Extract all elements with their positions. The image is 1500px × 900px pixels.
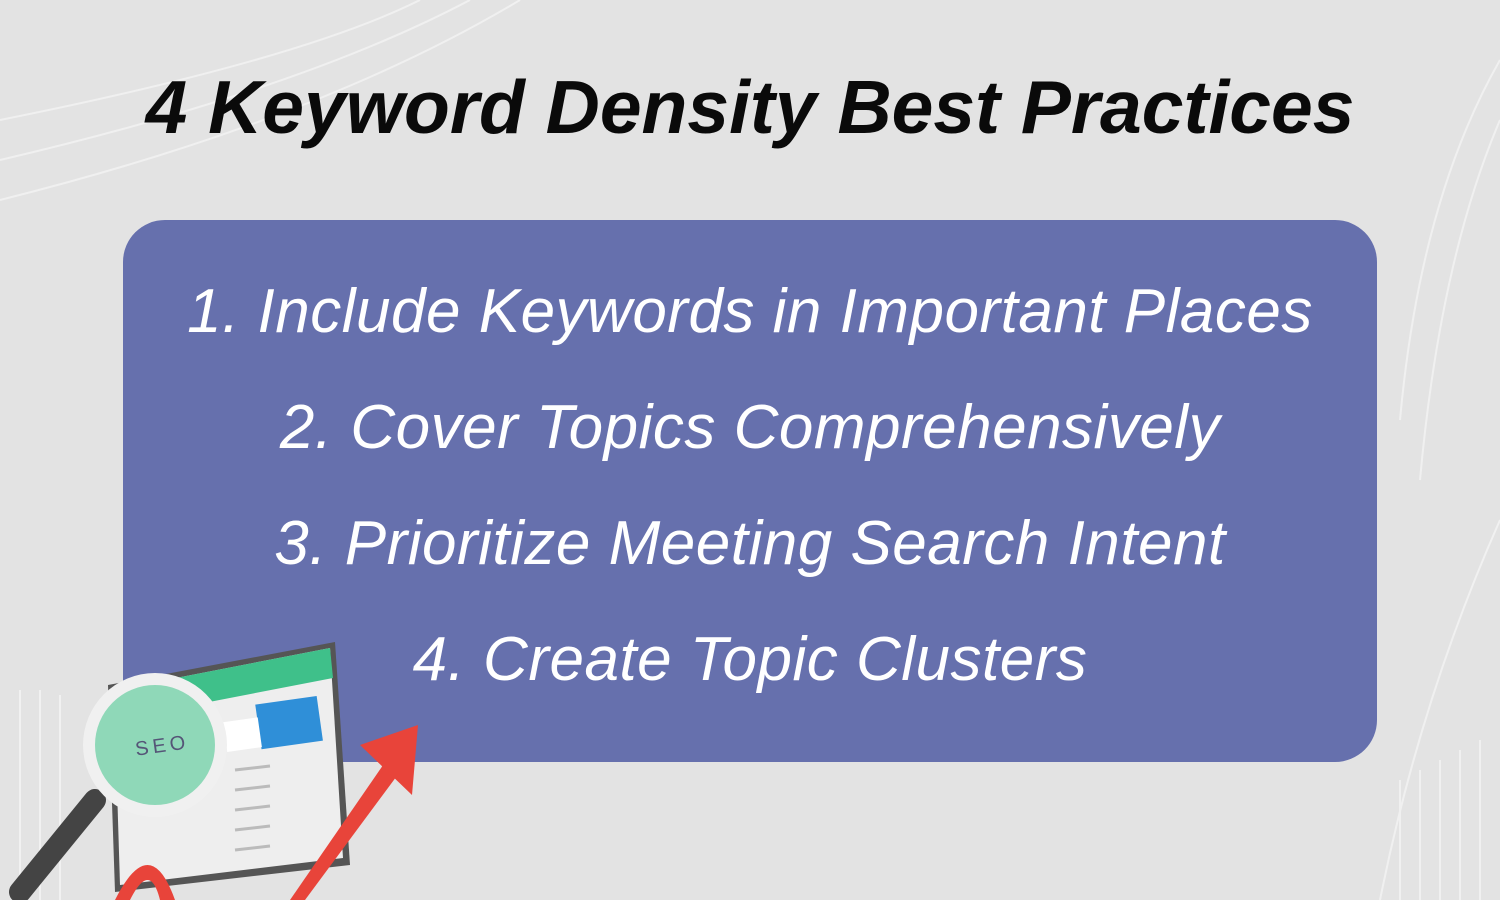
title: 4 Keyword Density Best Practices xyxy=(146,65,1354,149)
item 1: 1. Include Keywords in Important Places xyxy=(187,277,1313,346)
item 2: 2. Cover Topics Comprehensively xyxy=(280,393,1220,462)
icon: magnifier xyxy=(20,673,227,892)
illustration: SEO tablet with magnifier and arrow xyxy=(9,642,418,900)
icon: magnifier: SEO xyxy=(134,731,191,761)
panel: practices list xyxy=(123,220,1377,762)
item 4: 4. Create Topic Clusters xyxy=(413,625,1087,694)
icon: red arrow xyxy=(115,725,418,900)
item 3: 3. Prioritize Meeting Search Intent xyxy=(274,509,1226,578)
icon: tablet xyxy=(108,642,350,892)
